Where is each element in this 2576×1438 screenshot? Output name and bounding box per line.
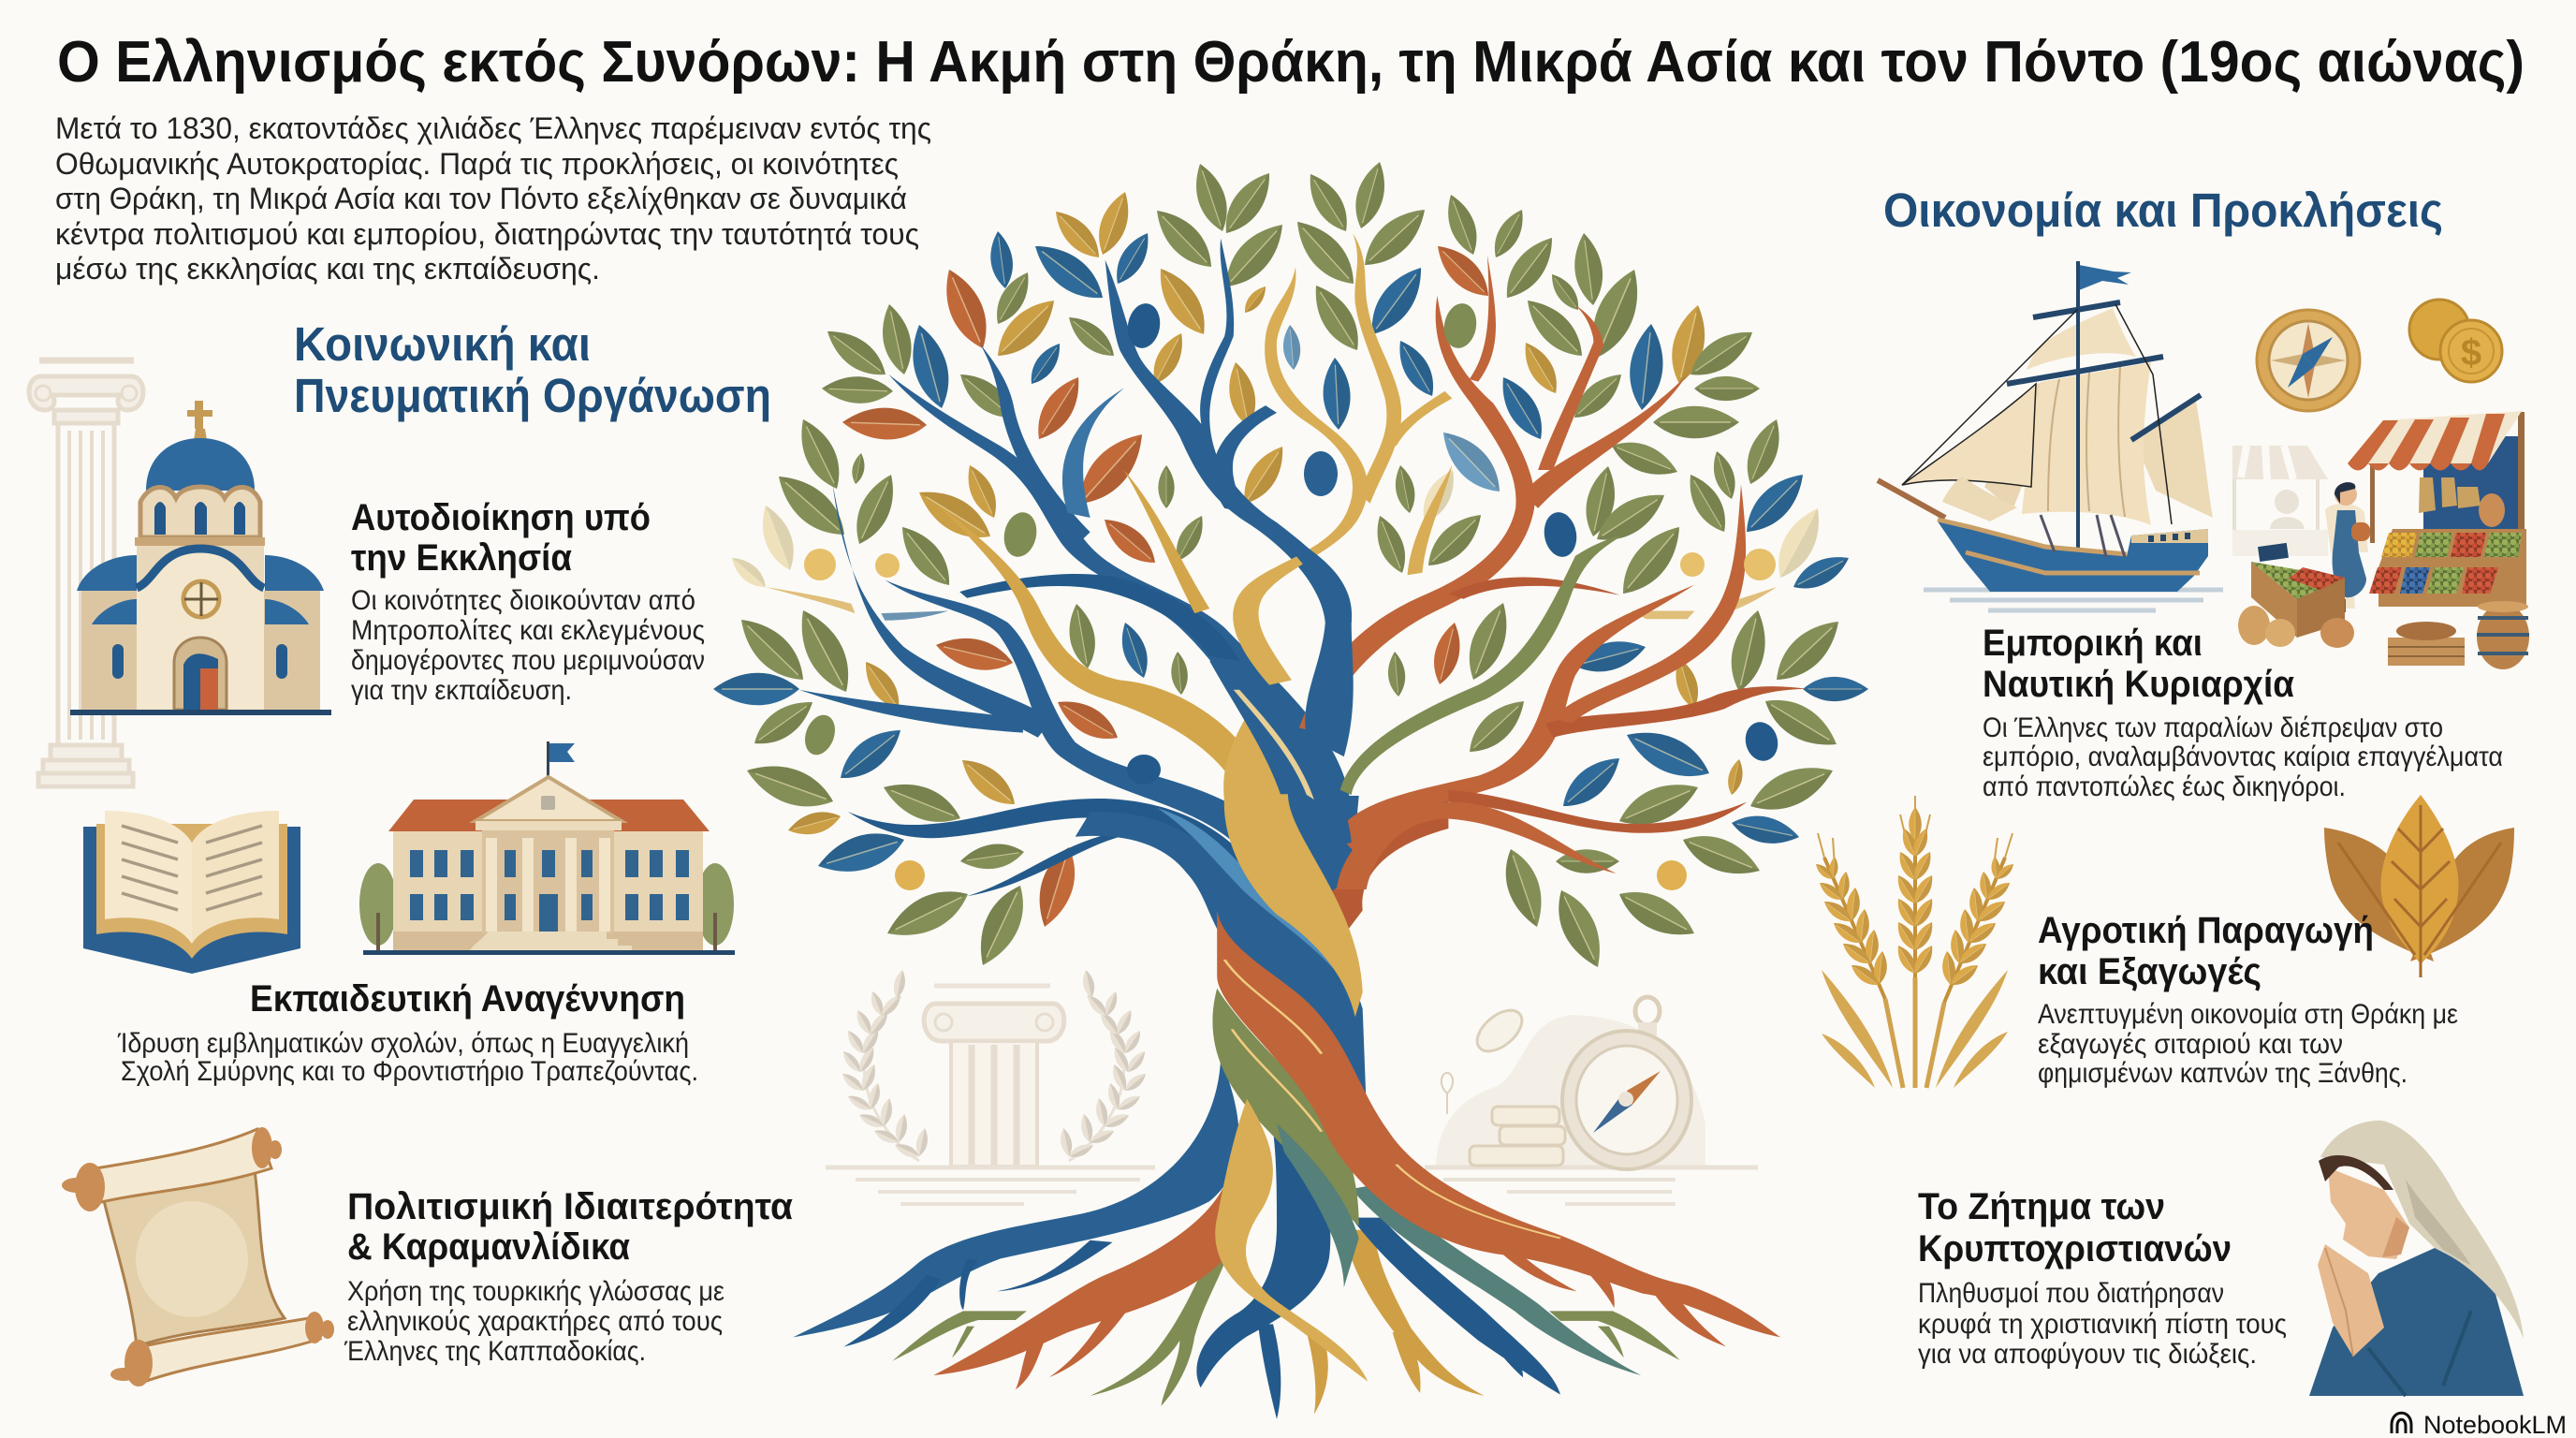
text: educational renaissance description: Ίδρυση εμβληματικών σχολών, όπως η Ευαγγελική: [117, 1028, 689, 1059]
heading: economy and challenges: Οικονομία και Προκλήσεις: [1883, 183, 2443, 237]
tree leaves: [713, 158, 1868, 974]
heading: cultural particularity: & Καραμανλίδικα: [347, 1226, 630, 1268]
text: crypto-Christians description: Πληθυσμοί που διατήρησαν: [1918, 1278, 2224, 1309]
text: self-government description: [351, 585, 705, 706]
heading: agricultural production and exports: [2038, 910, 2374, 992]
heading: commercial and maritime dominance: [1983, 623, 2294, 705]
icon: parchment scroll: [62, 1127, 334, 1387]
text: agricultural description: Ανεπτυγμένη οικονομία στη Θράκη με: [2038, 999, 2458, 1030]
text: cultural particularity description: [344, 1276, 724, 1367]
icon: open book: [83, 811, 300, 974]
heading: cultural particularity: [347, 1186, 793, 1268]
heading: commercial and maritime dominance: Ναυτική Κυριαρχία: [1983, 664, 2294, 705]
trunk and roots: [793, 794, 1780, 1419]
text: crypto-Christians description: για να αποφύγουν τις διώξεις.: [1918, 1339, 2257, 1370]
icon: praying woman: [2309, 1121, 2524, 1396]
icon: sailing ship: [1878, 261, 2223, 610]
text: self-government description: Μητροπολίτες και εκλεγμένους: [351, 615, 705, 646]
text: self-government description: για την εκπαίδευση.: [351, 675, 572, 706]
heading: social and spiritual organisation: Πνευματική Οργάνωση: [294, 369, 771, 422]
text: commercial and maritime description: [1983, 712, 2503, 802]
heading: agricultural production and exports: Αγροτική Παραγωγή: [2038, 910, 2374, 951]
olive tree: [713, 158, 1868, 1419]
text: educational renaissance description: [117, 1028, 698, 1087]
trunk lower strands back: [1292, 796, 1448, 935]
text: cultural particularity description: Έλληνες της Καππαδοκίας.: [344, 1336, 646, 1367]
intro paragraph: κέντρα πολιτισμού και εμπορίου, διατηρώντας την ταυτότητά τους: [55, 217, 919, 251]
text: commercial and maritime description: από παντοπώλες έως δικηγόροι.: [1983, 771, 2346, 802]
faded background stall: [2232, 446, 2328, 556]
upper branches: [766, 233, 1807, 889]
text: agricultural description: [2038, 999, 2458, 1089]
text: agricultural description: εξαγωγές σιταριού και των: [2038, 1029, 2343, 1060]
text: crypto-Christians description: κρυφά τη χριστιανική πίστη τους: [1918, 1309, 2287, 1340]
intro paragraph: Μετά το 1830, εκατοντάδες χιλιάδες Έλληνες παρέμειναν εντός της: [55, 111, 931, 145]
heading: commercial and maritime dominance: Εμπορική και: [1983, 623, 2203, 664]
text: cultural particularity description: Χρήση της τουρκικής γλώσσας με: [347, 1276, 724, 1307]
text: commercial and maritime description: εμπόριο, αναλαμβάνοντας καίρια επαγγέλματα: [1983, 741, 2503, 772]
icon: gold coins: [2409, 300, 2502, 382]
heading: crypto-Christians: Το Ζήτημα των: [1918, 1186, 2165, 1227]
heading: self-government under the Church: [351, 497, 651, 579]
text: self-government description: δημογέροντες που μεριμνούσαν: [351, 645, 705, 676]
text: educational renaissance description: Σχολή Σμύρνης και το Φροντιστήριο Τραπεζούντας.: [121, 1056, 698, 1087]
text: cultural particularity description: ελληνικούς χαρακτήρες από τους: [347, 1306, 723, 1337]
merchant: [2325, 482, 2370, 612]
icon: school building: [359, 741, 735, 955]
heading: agricultural production and exports: και Εξαγωγές: [2038, 951, 2261, 992]
intro paragraph: [55, 111, 931, 286]
heading: self-government under the Church: Αυτοδιοίκηση υπό: [351, 497, 651, 538]
heading: social and spiritual organisation: Κοινωνική και: [294, 317, 591, 371]
faded column with laurel wreath: [826, 969, 1155, 1204]
heading: educational renaissance: Εκπαιδευτική Αναγέννηση: [250, 978, 685, 1020]
text: commercial and maritime description: Οι Έλληνες των παραλίων διέπρεψαν στο: [1983, 712, 2443, 743]
icon: faded ionic column: [29, 360, 143, 786]
heading: cultural particularity: Πολιτισμική Ιδιαιτερότητα: [347, 1186, 793, 1227]
icon: wheat: [1813, 796, 2016, 1088]
faded compass and coins: [1425, 997, 1758, 1204]
text: self-government description: Οι κοινότητες διοικούνταν από: [351, 585, 695, 616]
text: agricultural description: φημισμένων καπνών της Ξάνθης.: [2038, 1058, 2408, 1089]
icon: gold coins: $: [2461, 332, 2481, 374]
icon: market stall: [2232, 411, 2529, 669]
icon: compass: [2257, 310, 2360, 411]
heading: crypto-Christians: [1918, 1186, 2232, 1269]
text: crypto-Christians description: [1918, 1278, 2287, 1370]
heading: self-government under the Church: την Εκκλησία: [351, 537, 572, 579]
intro paragraph: στη Θράκη, τη Μικρά Ασία και τον Πόντο εξελίχθηκαν σε δυναμικά: [55, 182, 907, 215]
intro paragraph: μέσω της εκκλησίας και της εκπαίδευσης.: [55, 252, 600, 286]
heading: crypto-Christians: Κρυπτοχριστιανών: [1918, 1228, 2232, 1269]
icon: tobacco leaves: [2324, 795, 2514, 977]
icon: byzantine church: [70, 401, 331, 715]
intro paragraph: Οθωμανικής Αυτοκρατορίας. Παρά τις προκλήσεις, οι κοινότητες: [55, 147, 899, 181]
olives and gold fruit: [799, 301, 1782, 890]
heading: social and spiritual organisation: [294, 317, 771, 422]
